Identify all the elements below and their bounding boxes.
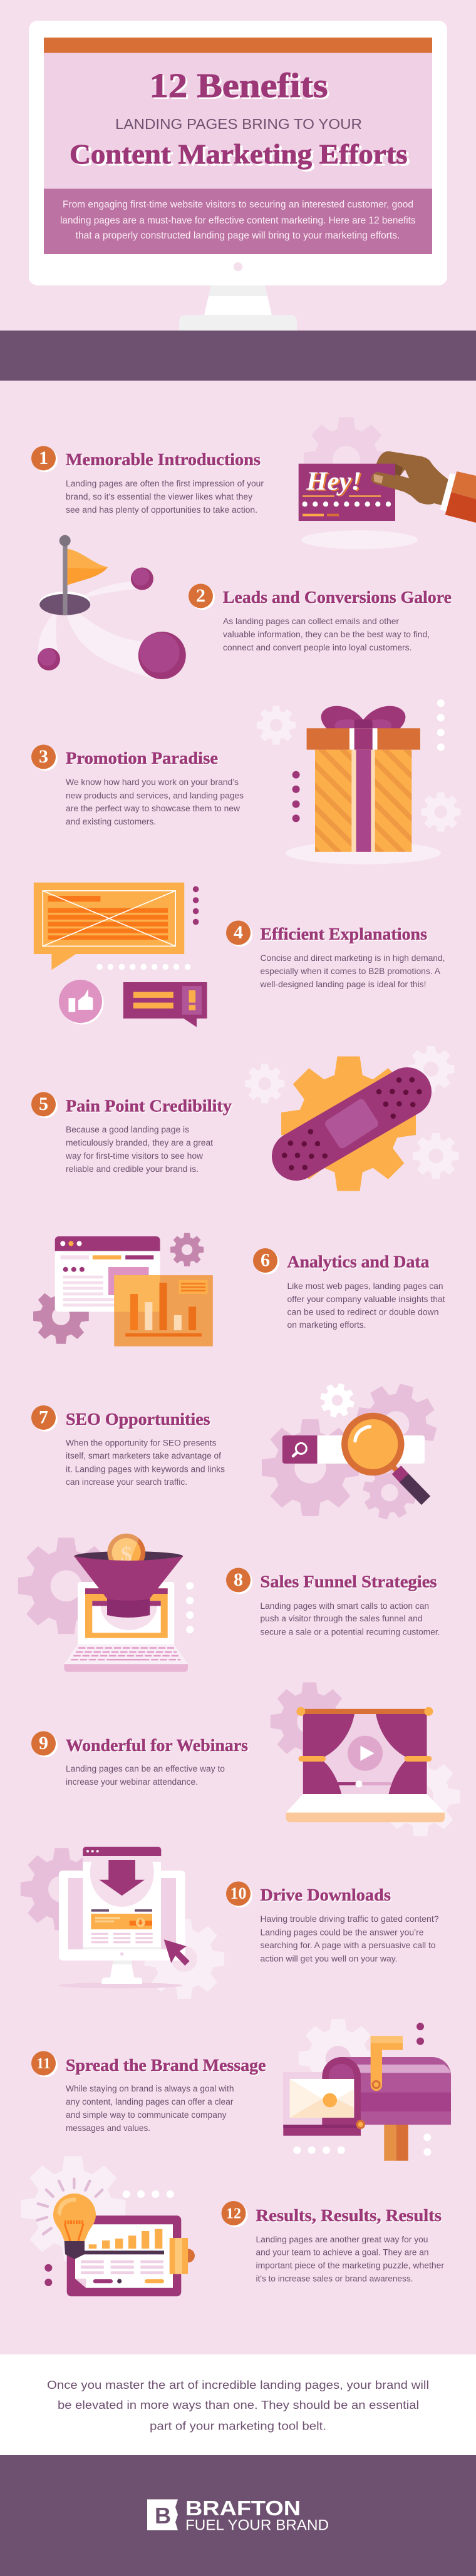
body text: When the opportunity for SEO presents (66, 1439, 217, 1447)
closing text (47, 2379, 429, 2433)
illustration: funnel and laptop (18, 1534, 194, 1672)
body text (65, 1125, 213, 1174)
number badge 3: 3 (39, 746, 48, 767)
number badge 12: 12 (226, 2206, 241, 2222)
body text: Landing pages could be the answer you’re (261, 1928, 423, 1937)
body text: Because a good landing page is (66, 1125, 189, 1134)
monitor stand (179, 285, 297, 331)
body text: Landing pages are another great way for you (256, 2235, 428, 2244)
number badge 6 (253, 1248, 279, 1275)
title: Content Marketing Efforts: Content Marketing Efforts (70, 139, 407, 170)
body text: We know how hard you work on your brand’s (66, 777, 239, 787)
body text: are the perfect way to showcase them to new (66, 804, 240, 813)
body text (261, 1914, 438, 1963)
panel: benefit 1 (31, 417, 476, 549)
intro text (60, 199, 416, 241)
body text (256, 2235, 445, 2284)
number badge 10: 10 (230, 1884, 247, 1902)
illustration: gift box (257, 699, 460, 865)
body text (66, 777, 244, 826)
illustration: download monitor (21, 1838, 224, 1999)
body text: Landing pages can be an effective way to (66, 1764, 225, 1773)
number badge 6: 6 (261, 1250, 270, 1271)
body text (66, 479, 264, 515)
heading: SEO Opportunities (66, 1410, 210, 1429)
panel: benefit 3 (31, 699, 460, 865)
heading: Analytics and Data (287, 1252, 430, 1271)
panel: benefit 6 (33, 1233, 445, 1347)
number badge 5 (31, 1092, 58, 1118)
body text: on marketing efforts. (287, 1320, 366, 1330)
body text (66, 1764, 225, 1787)
body text: reliable and credible your brand is. (66, 1164, 199, 1174)
body text (66, 1439, 225, 1487)
closing text: be elevated in more ways than one. They should be an essential (58, 2399, 419, 2411)
body text: well-designed landing page is ideal for this! (259, 980, 426, 989)
body text: way for first-time visitors to see how (65, 1151, 203, 1161)
body text: and existing customers. (66, 817, 156, 826)
body text: any content, landing pages can offer a clear (66, 2097, 234, 2106)
panel: benefit 9 (31, 1682, 460, 1836)
body text: While staying on brand is always a goal with (66, 2084, 234, 2093)
illustration: analytics browser and chart (33, 1233, 213, 1347)
body text: especially when it comes to B2B promotions. A (261, 967, 440, 976)
panel: benefit 7 (31, 1375, 445, 1525)
subtitle: LANDING PAGES BRING TO YOUR (115, 116, 362, 132)
panel: benefit 8 (18, 1534, 440, 1672)
body text: and your team to achieve a goal. They are an (256, 2248, 428, 2257)
number badge 7: 7 (39, 1407, 48, 1427)
illustration: bulb and clipboard (21, 2156, 195, 2296)
number badge 11 (31, 2051, 58, 2077)
illustration: bandage on gear (245, 1046, 458, 1191)
orange top bar (44, 38, 432, 53)
number badge 12 (222, 2201, 248, 2227)
body text: new products and services, and landing pages (66, 791, 244, 800)
body text: important piece of the marketing puzzle, whether (256, 2261, 445, 2271)
body text: see and has plenty of opportunities to take action. (66, 505, 257, 515)
heading: Leads and Conversions Galore (223, 588, 452, 607)
heading: Efficient Explanations (261, 925, 427, 943)
number badge 10 (226, 1882, 252, 1907)
panel: closing statement (0, 2354, 476, 2455)
intro panel (44, 189, 432, 254)
illustration: mailbox (283, 2019, 451, 2161)
body text: secure a sale or a potential recurring customer. (261, 1628, 440, 1636)
number badge 8 (226, 1568, 252, 1594)
brand name: BRAFTON (185, 2496, 301, 2520)
panel: header monitor (29, 21, 447, 331)
body text: messages and values. (66, 2123, 150, 2133)
illustration: hand holding card: Hey! (306, 468, 361, 496)
number badge 2: 2 (196, 585, 205, 606)
body text: meticulously branded, they are a great (66, 1138, 213, 1147)
number badge 11: 11 (36, 2056, 51, 2072)
panel: benefit 5 (31, 1046, 458, 1191)
monitor frame (29, 21, 447, 285)
body text (287, 1281, 445, 1330)
body text: Having trouble driving traffic to gated content? (261, 1914, 438, 1924)
heading: Pain Point Credibility (66, 1097, 232, 1116)
heading: Wonderful for Webinars (66, 1736, 248, 1755)
logo mark: B (155, 2503, 171, 2528)
body text (259, 953, 445, 989)
intro text: From engaging first-time website visitors to securing an interested customer, good (63, 199, 413, 210)
body text: Concise and direct marketing is in high demand, (261, 953, 445, 963)
panel: benefit 11 (31, 2019, 451, 2161)
body text: brand, so it's essential the viewer likes what they (66, 492, 252, 501)
body text: Landing pages with smart calls to action can (261, 1601, 429, 1611)
body text: can increase your search traffic. (66, 1477, 187, 1487)
title panel (44, 53, 432, 189)
body text: Landing pages are often the first impression of your (66, 479, 264, 488)
panel: footer (0, 2455, 476, 2576)
body text: action will get you well on your way. (261, 1954, 397, 1963)
body text (66, 2084, 234, 2133)
panel: benefit 4 (34, 883, 445, 1027)
number badge 4: 4 (234, 922, 243, 943)
body text: it's to increase sales or brand awareness. (256, 2274, 413, 2284)
closing text: Once you master the art of incredible landing pages, your brand will (47, 2379, 429, 2391)
heading: Spread the Brand Message (66, 2056, 266, 2075)
heading: Promotion Paradise (66, 749, 218, 767)
body text (261, 1601, 440, 1636)
number badge 5: 5 (39, 1094, 48, 1114)
body text: Like most web pages, landing pages can (287, 1281, 443, 1291)
body text: increase your webinar attendance. (66, 1777, 198, 1787)
panel: benefit 2 (38, 535, 452, 679)
illustration: funnel and laptop: $ (121, 1542, 132, 1567)
illustration: webinar curtain laptop (271, 1682, 460, 1836)
body text: connect and convert people into loyal customers. (223, 643, 412, 652)
body text (223, 617, 430, 652)
heading: Sales Funnel Strategies (261, 1573, 437, 1591)
panel: benefit 12 (21, 2156, 445, 2296)
body text: can be used to redirect or double down (287, 1307, 438, 1317)
illustration: hand holding card (299, 417, 476, 549)
number badge 3 (31, 745, 58, 771)
number badge 2 (189, 583, 215, 610)
body text: and simple way to communicate company (66, 2110, 227, 2120)
heading: Results, Results, Results (256, 2206, 442, 2225)
number badge 8: 8 (234, 1569, 243, 1590)
intro text: that a properly constructed landing page will bring to your marketing efforts. (76, 230, 400, 241)
body text: it. Landing pages with keywords and links (66, 1465, 225, 1474)
tagline: FUEL YOUR BRAND (185, 2517, 329, 2534)
number badge 1: 1 (39, 448, 48, 468)
number badge 9: 9 (39, 1733, 48, 1753)
body text: searching for. A page with a persuasive call to (261, 1941, 436, 1950)
body text: As landing pages can collect emails and other (223, 617, 400, 626)
panel: benefit 10 (21, 1838, 438, 1999)
body text: valuable information, they can be the best way to find, (223, 630, 430, 639)
illustration: speech bubbles (34, 883, 207, 1027)
body text: offer your company valuable insights that (287, 1295, 445, 1304)
monitor power dot (234, 262, 242, 271)
number badge 7 (31, 1405, 58, 1432)
illustration: search bar and magnifier (262, 1375, 445, 1525)
title: 12 Benefits: 12 Benefits (149, 66, 328, 105)
number badge 4 (226, 920, 252, 947)
body text: itself, smart marketers take advantage of (66, 1451, 221, 1460)
logo mark (147, 2499, 178, 2530)
heading: Drive Downloads (261, 1886, 391, 1904)
intro text: landing pages are a must-have for effective content marketing. Here are 12 benefits (60, 215, 416, 226)
closing text: part of your marketing tool belt. (150, 2420, 326, 2433)
number badge 1 (31, 446, 58, 472)
number badge 9 (31, 1732, 58, 1757)
dark band (0, 331, 476, 381)
illustration: flag and balls (38, 535, 186, 679)
heading: Memorable Introductions (66, 450, 261, 469)
body text: push a visitor through the sales funnel and (261, 1614, 422, 1623)
